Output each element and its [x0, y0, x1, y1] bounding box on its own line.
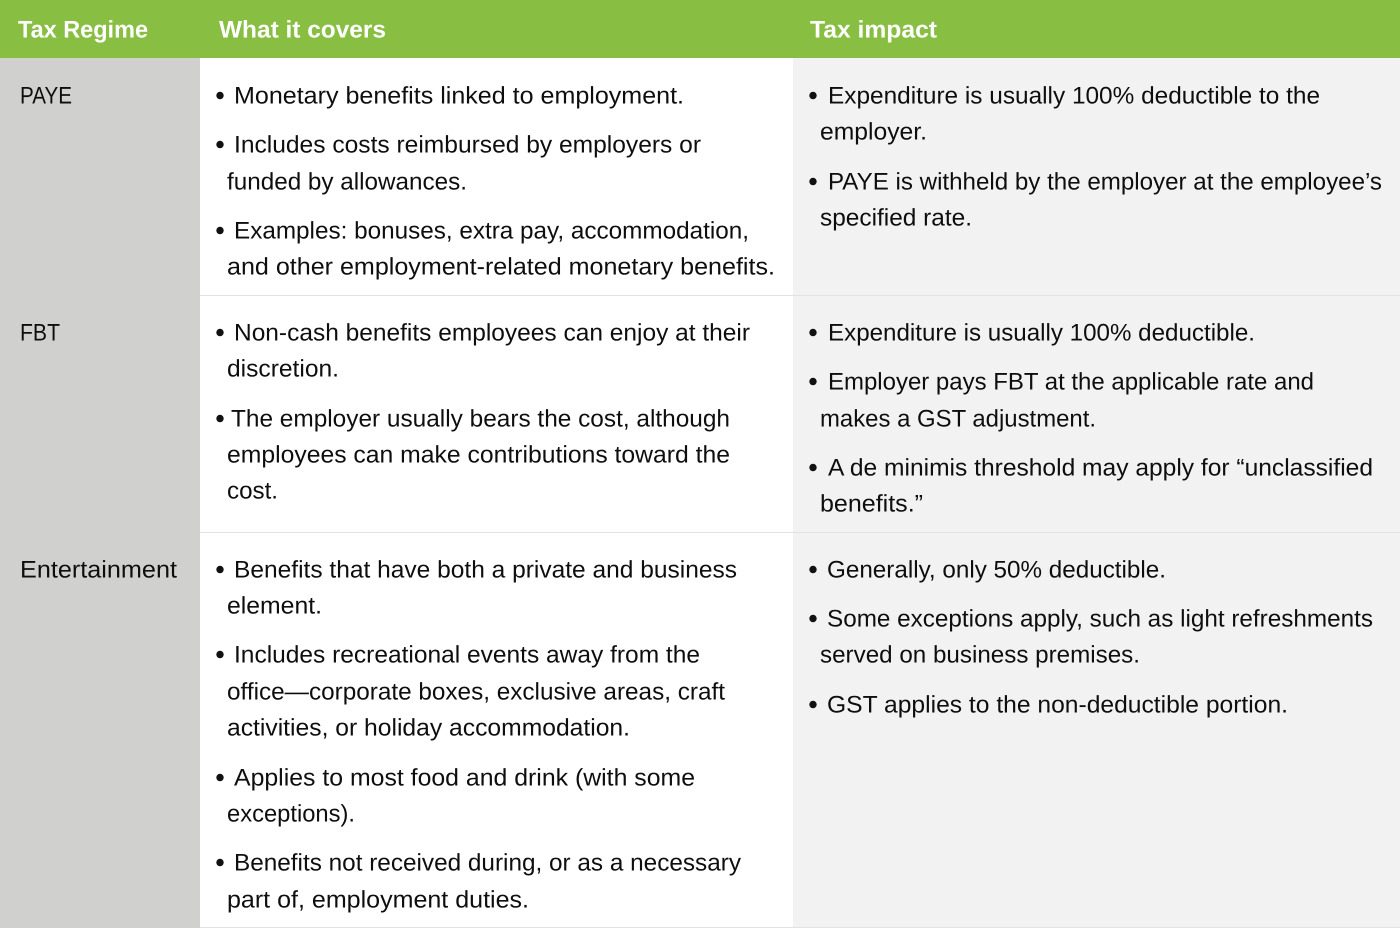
- Entertainment: tax impact: Generally, only 50% deductible.: [827, 556, 1166, 583]
- Entertainment: what it covers: part of, employment duties.: [227, 886, 529, 913]
- PAYE: what it covers: Examples: bonuses, extra pay, accommodation,: [234, 217, 749, 244]
- Entertainment: what it covers: Benefits not received during, or as a necessary: [234, 849, 741, 876]
- Entertainment: tax impact: [809, 556, 1373, 718]
- FBT: what it covers: [216, 319, 750, 504]
- FBT: what it covers: Non-cash benefits employees can enjoy at their: [234, 319, 750, 346]
- Entertainment: what it covers: Benefits that have both a private and business: [234, 556, 737, 583]
- Entertainment: what it covers: Includes recreational events away from the: [234, 641, 700, 668]
- FBT: what it covers: discretion.: [227, 355, 339, 382]
- Entertainment: what it covers: exceptions).: [227, 800, 355, 827]
- FBT: tax impact: makes a GST adjustment.: [820, 405, 1096, 432]
- Entertainment: what it covers: Applies to most food and drink (with some: [234, 764, 695, 791]
- FBT: tax impact: Employer pays FBT at the applicable rate and: [828, 368, 1314, 395]
- FBT: what it covers: employees can make contributions toward the: [227, 441, 730, 468]
- PAYE: what it covers: [216, 82, 775, 280]
- PAYE: tax impact: specified rate.: [820, 204, 972, 231]
- PAYE: tax impact: PAYE is withheld by the employer at the employee’s: [828, 168, 1382, 195]
- Entertainment: what it covers: [216, 556, 741, 913]
- Entertainment: tax impact: served on business premises.: [820, 641, 1140, 668]
- Entertainment: what it covers: office—corporate boxes, exclusive areas, craft: [227, 678, 725, 705]
- row label: Entertainment: Entertainment: [20, 556, 177, 583]
- PAYE: what it covers: and other employment-related monetary benefits.: [227, 253, 775, 280]
- row label: FBT: FBT: [20, 319, 60, 346]
- PAYE: tax impact: Expenditure is usually 100% deductible to the: [828, 82, 1320, 109]
- FBT: tax impact: benefits.”: [820, 490, 923, 517]
- PAYE: what it covers: Monetary benefits linked to employment.: [234, 82, 684, 109]
- heading: tax regime: Tax Regime: [18, 16, 148, 43]
- PAYE: what it covers: funded by allowances.: [227, 168, 467, 195]
- Entertainment: tax impact: GST applies to the non-deductible portion.: [827, 691, 1288, 718]
- FBT: tax impact: Expenditure is usually 100% deductible.: [828, 319, 1255, 346]
- FBT: tax impact: A de minimis threshold may apply for “unclassified: [828, 454, 1373, 481]
- FBT: what it covers: cost.: [227, 477, 278, 504]
- heading: tax impact: Tax impact: [810, 16, 937, 43]
- Entertainment: what it covers: element.: [227, 592, 322, 619]
- PAYE: tax impact: employer.: [820, 118, 927, 145]
- FBT: tax impact: [809, 319, 1373, 517]
- Entertainment: tax impact: Some exceptions apply, such as light refreshments: [827, 605, 1373, 632]
- heading: what it covers: What it covers: [219, 16, 386, 43]
- Entertainment: what it covers: activities, or holiday accommodation.: [227, 714, 630, 741]
- FBT: what it covers: The employer usually bears the cost, although: [231, 405, 730, 432]
- PAYE: what it covers: Includes costs reimbursed by employers or: [234, 131, 701, 158]
- PAYE: tax impact: [809, 82, 1382, 231]
- row label: PAYE: PAYE: [20, 82, 72, 109]
- header row: [0, 0, 1400, 58]
